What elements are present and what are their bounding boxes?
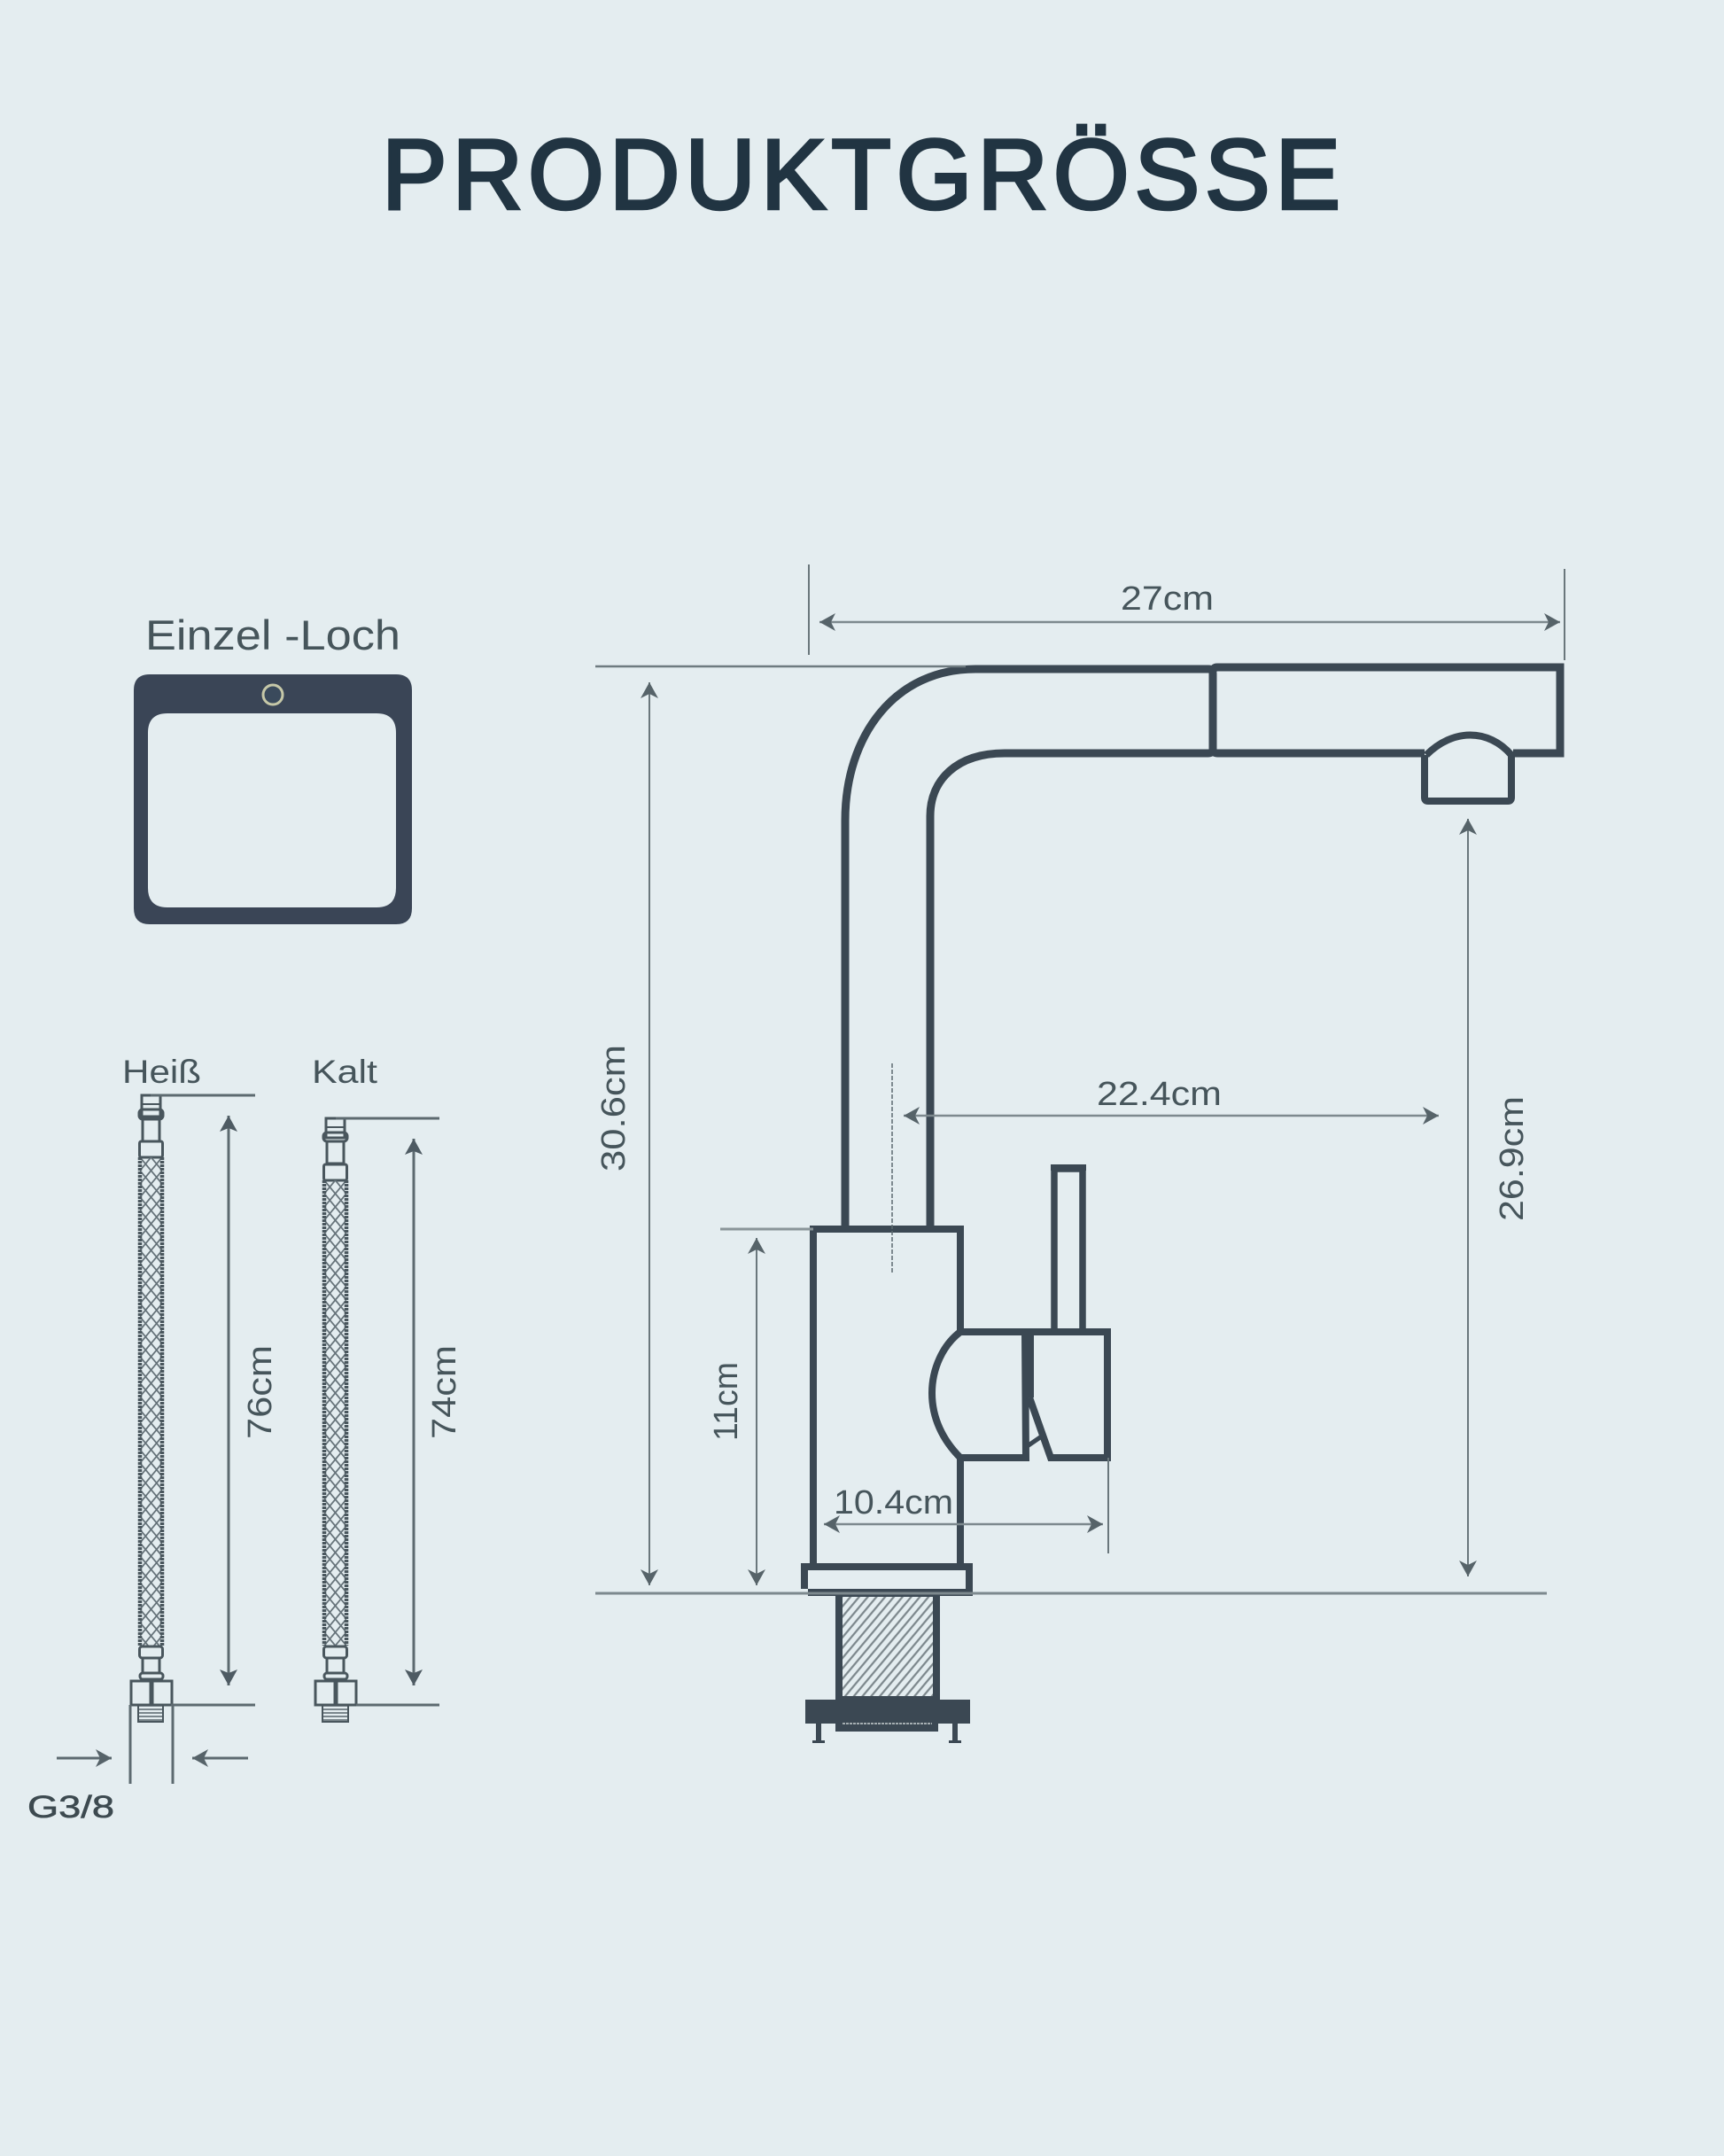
hose: cold xyxy=(315,1118,356,1722)
dimension: 11cm: 11cm xyxy=(708,1362,745,1441)
bolts xyxy=(812,1724,961,1743)
lever cap xyxy=(1051,1164,1086,1171)
dimension: 30.6cm: 30.6cm xyxy=(595,1045,633,1171)
handle lever block xyxy=(1025,1332,1107,1458)
panel: single hole sink xyxy=(134,611,412,924)
dimension: 74cm: 74cm xyxy=(426,1345,463,1439)
sink frame xyxy=(134,674,412,924)
arrow: right-pointing xyxy=(57,1756,112,1760)
handle knob xyxy=(932,1332,1026,1458)
dimension: 26.9cm: 26.9cm xyxy=(1494,1096,1531,1221)
mounting plate xyxy=(805,1700,970,1724)
panel: hot hose xyxy=(122,1054,279,1722)
handle thick divider xyxy=(1023,1332,1034,1397)
dimension: 22.4cm: 22.4cm xyxy=(1097,1076,1222,1113)
label: Kalt: Kalt xyxy=(312,1054,378,1090)
nut xyxy=(835,1724,938,1732)
body xyxy=(813,1229,960,1567)
faucet drawing xyxy=(804,667,1560,1592)
icon: tap hole xyxy=(263,685,283,704)
aerator xyxy=(1425,736,1511,801)
pull-out head xyxy=(1213,667,1560,753)
spout xyxy=(845,669,1213,1229)
handle lever xyxy=(1054,1169,1083,1332)
mounting shank xyxy=(805,1593,970,1743)
arrow: left-pointing xyxy=(192,1756,248,1760)
base plate xyxy=(804,1567,969,1592)
label: Heiß: Heiß xyxy=(122,1054,201,1090)
dimension: 76cm: 76cm xyxy=(242,1345,279,1439)
nut highlight xyxy=(843,1723,932,1724)
handle small tick xyxy=(1026,1436,1043,1447)
label: Einzel -Loch: Einzel -Loch xyxy=(145,611,400,658)
hatched shank xyxy=(839,1593,936,1700)
dimension: 27cm: 27cm xyxy=(1121,580,1214,618)
label: G3/8: G3/8 xyxy=(27,1790,114,1825)
hose: hot xyxy=(131,1095,172,1722)
title: PRODUKTGRÖSSE xyxy=(382,119,1346,230)
panel: cold hose xyxy=(312,1054,463,1722)
dimension: 10.4cm: 10.4cm xyxy=(834,1484,953,1522)
